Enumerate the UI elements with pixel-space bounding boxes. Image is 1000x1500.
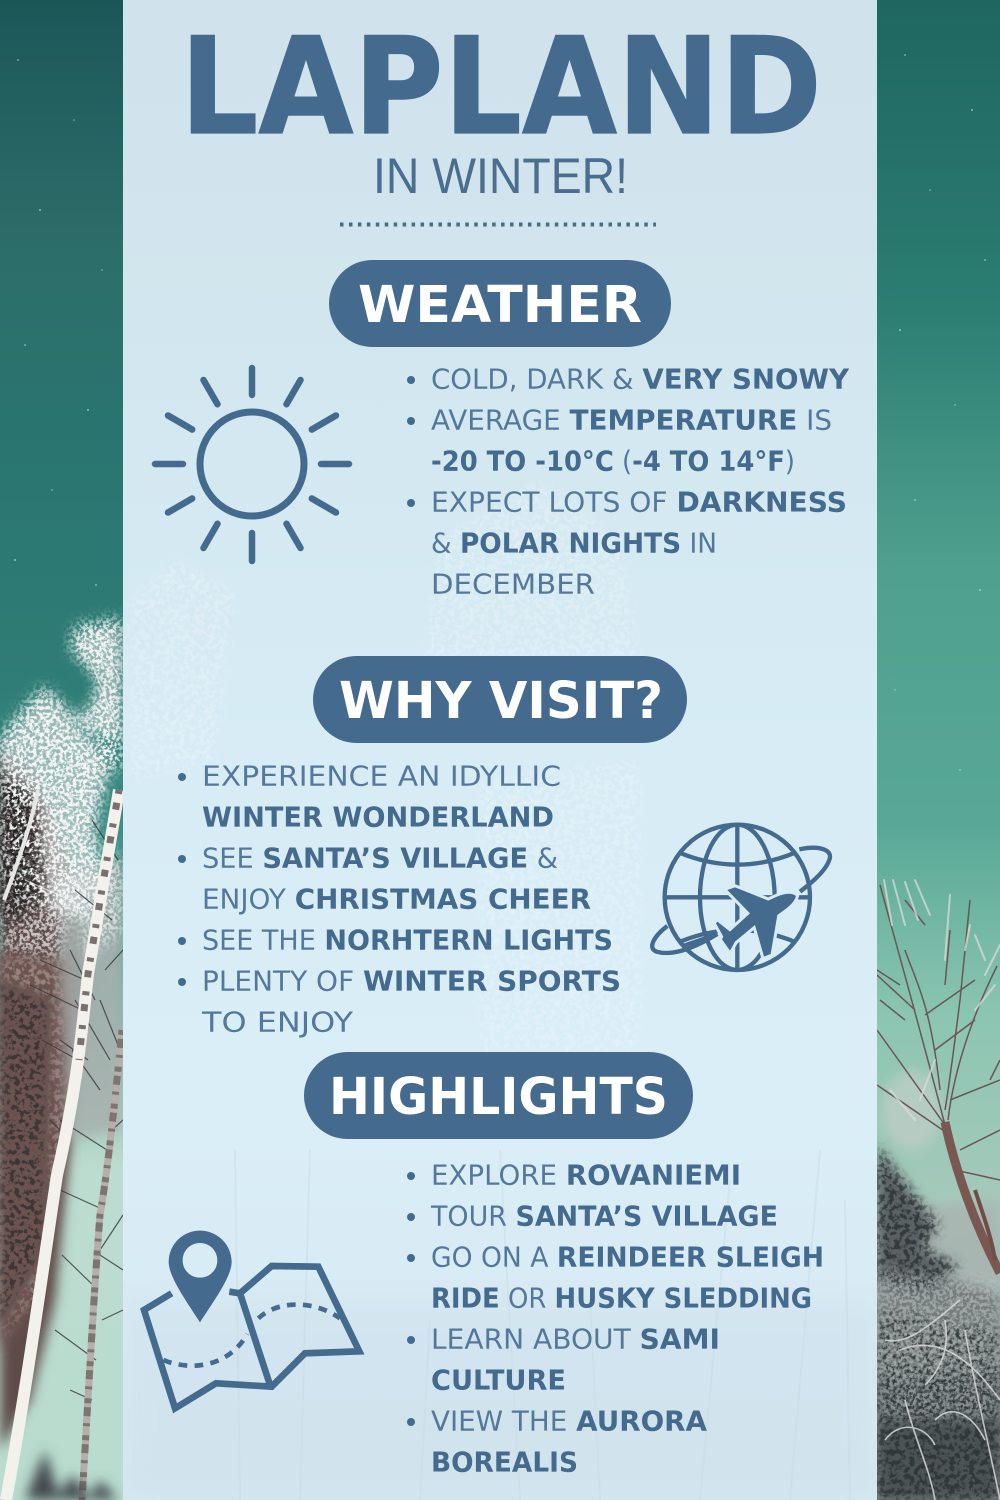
text: highlights bullets: EXPLORE ROVANIEMI (431, 1158, 741, 1192)
text: why visit bullets: EXPERIENCE AN IDYLLIC (202, 760, 561, 792)
right tree (877, 880, 1000, 1500)
text: why visit bullets: ENJOY CHRISTMAS CHEER (202, 882, 591, 916)
text: why visit bullets (178, 760, 621, 1038)
grey haze behind branches (55, 860, 123, 1140)
text: weather bullets: AVERAGE TEMPERATURE IS (431, 404, 832, 436)
heading: weather (329, 260, 671, 347)
subtitle: IN WINTER! (373, 148, 628, 204)
text: weather bullets: & POLAR NIGHTS IN (431, 526, 717, 560)
conifer (877, 1145, 955, 1290)
text: why visit bullets: TO ENJOY (201, 1006, 354, 1038)
bare branches (877, 885, 1000, 1180)
icon: globe with plane (652, 825, 830, 970)
text: highlights bullets (407, 1158, 824, 1478)
lower forest (877, 1275, 1000, 1500)
panel background (123, 0, 877, 1500)
heading: highlights: HIGHLIGHTS (329, 1068, 668, 1127)
text: highlights bullets: VIEW THE AURORA (431, 1404, 707, 1438)
heading: why visit: WHY VISIT? (339, 672, 663, 731)
text: highlights bullets: TOUR SANTA’S VILLAGE (430, 1200, 778, 1232)
heading: highlights (304, 1052, 693, 1139)
title: LAPLAND (180, 9, 822, 165)
text: weather bullets: -20 TO -10°C (-4 TO 14°F) (431, 444, 795, 478)
frosted canopy (0, 625, 122, 920)
heading: weather: WEATHER (358, 276, 642, 335)
text: highlights bullets: BOREALIS (431, 1446, 578, 1478)
text: highlights bullets: RIDE OR HUSKY SLEDDING (431, 1282, 812, 1314)
bottom conifers (25, 1450, 118, 1500)
text: why visit bullets: SEE THE NORHTERN LIGHTS (202, 924, 613, 956)
frosted twigs in the forest (885, 1300, 1000, 1500)
pale haze (882, 1070, 942, 1150)
text: why visit bullets: SEE SANTA’S VILLAGE & (202, 842, 558, 874)
text: highlights bullets: GO ON A REINDEER SLEIGH (431, 1240, 824, 1274)
text: why visit bullets: PLENTY OF WINTER SPORTS (202, 964, 621, 998)
left birch trees (0, 617, 123, 1500)
icon: sun (155, 368, 349, 561)
text: weather bullets: DECEMBER (431, 568, 595, 600)
birch trunks (4, 790, 38, 900)
dark and brown tree mass (0, 760, 85, 1450)
icon: map with pin (144, 1231, 359, 1408)
text: highlights bullets: LEARN ABOUT SAMI (431, 1322, 720, 1356)
text: weather bullets: EXPECT LOTS OF DARKNESS (431, 486, 847, 518)
text: weather bullets (407, 362, 850, 600)
text: why visit bullets: WINTER WONDERLAND (202, 800, 554, 834)
heading: why visit (313, 656, 687, 743)
text: highlights bullets: CULTURE (431, 1364, 566, 1396)
small branches (30, 820, 123, 1400)
text: weather bullets: COLD, DARK & VERY SNOWY (431, 362, 850, 396)
